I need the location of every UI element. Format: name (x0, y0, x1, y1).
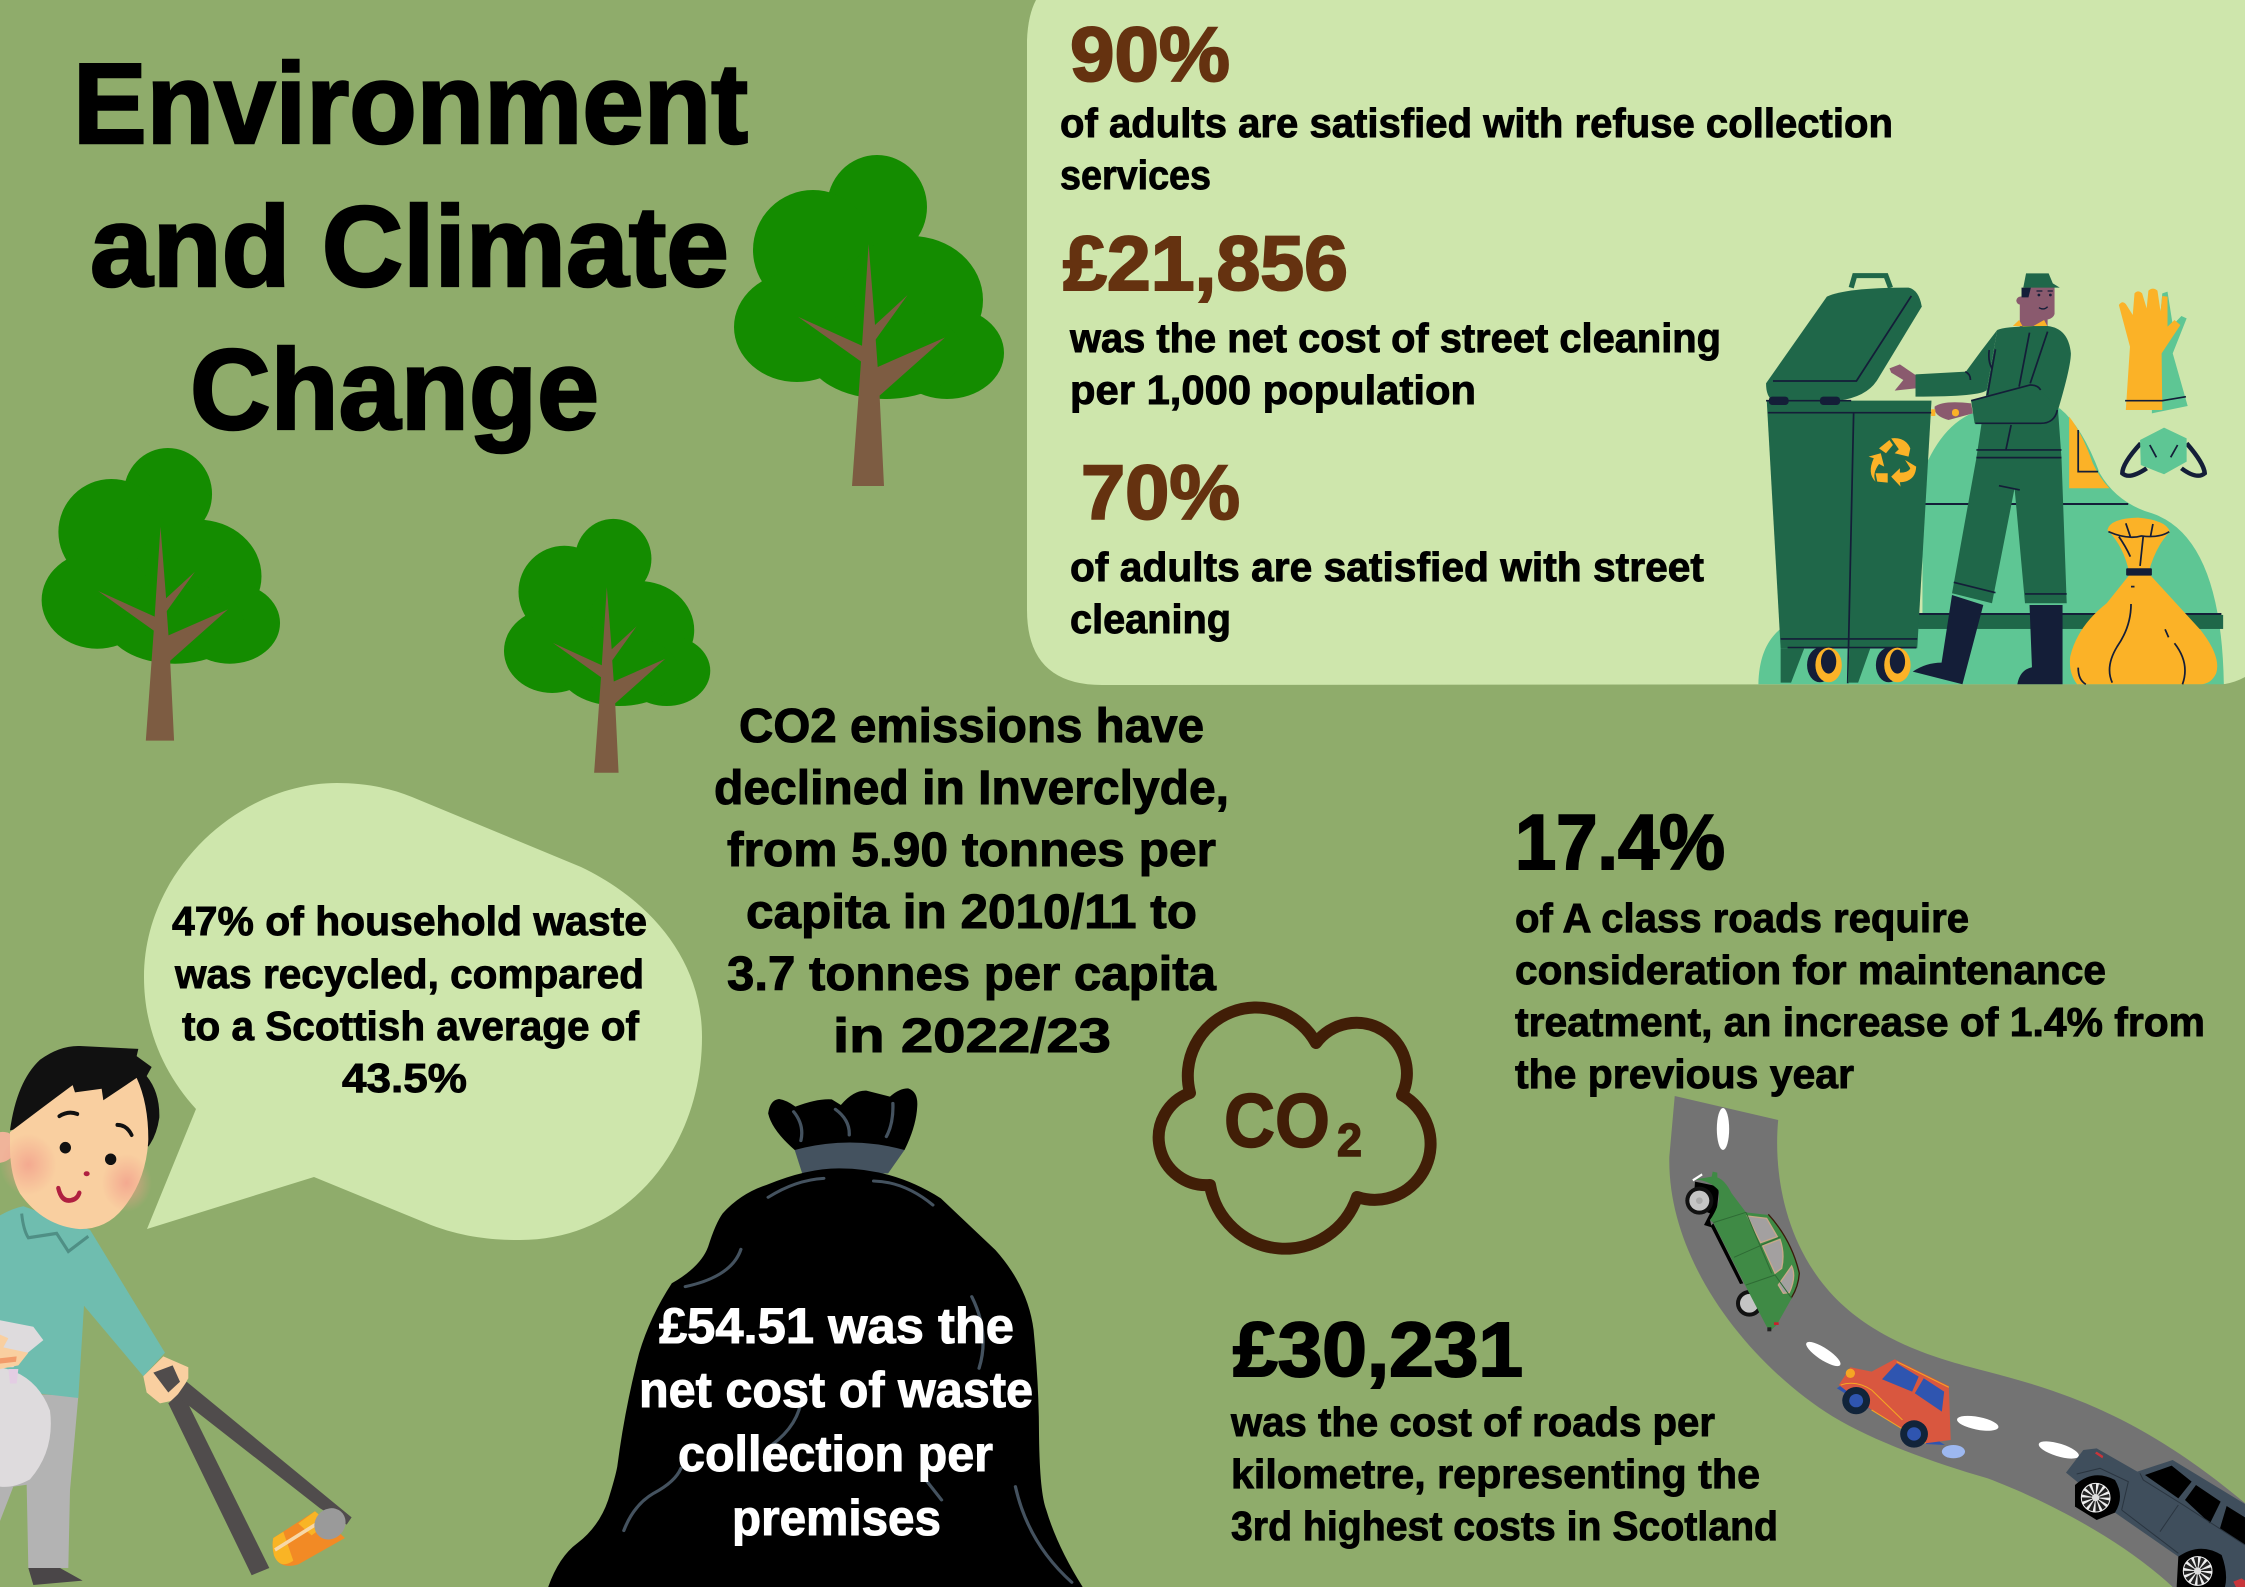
icon: CO2 cloud: CO (1224, 1079, 1330, 1164)
stat: A class roads: consideration for maintenance (1515, 947, 2106, 993)
text: net cost of waste collection: collection per (678, 1426, 993, 1482)
car: red (1837, 1359, 1965, 1458)
text: recycling rate: was recycled, compared (174, 951, 644, 997)
illustration: boy litter picking (0, 1046, 352, 1585)
stat: 70% street cleaning satisfaction: cleaning (1070, 596, 1231, 642)
text: net cost of waste collection: net cost of waste (639, 1362, 1033, 1418)
stat: 90% refuse collection satisfaction: 90% (1070, 12, 1230, 98)
title: Change (190, 327, 599, 454)
text: net cost of waste collection (639, 1298, 1033, 1546)
text: CO2 emissions decline: declined in Inverclyde, (714, 762, 1229, 815)
text: CO2 emissions decline: 3.7 tonnes per capita (727, 948, 1216, 1001)
text: CO2 emissions decline: from 5.90 tonnes per (727, 824, 1216, 877)
stat: cost of roads: was the cost of roads per (1230, 1399, 1715, 1445)
stat: A class roads: the previous year (1515, 1051, 1854, 1097)
stat: street cleaning net cost: was the net cost of street cleaning (1069, 315, 1721, 361)
stat: A class roads: treatment, an increase of 1.4% from (1515, 999, 2205, 1045)
icon: tree centre (504, 519, 710, 773)
speech bubble (144, 783, 702, 1240)
text: recycling rate: 47% of household waste (172, 898, 647, 944)
icon: tree lower left (42, 448, 280, 741)
illustration: road with cars (1669, 1096, 2245, 1587)
icon: CO2 cloud: 2 (1337, 1114, 1362, 1166)
icon: CO2 cloud (1159, 1008, 1431, 1249)
title: Environment (73, 41, 748, 168)
panel: refuse and street cleaning stats (1027, 0, 2245, 685)
icon: tree top right of title (734, 155, 1004, 486)
illustration: black bin bag (548, 1088, 1083, 1587)
title: and Climate (90, 184, 729, 311)
stat: cost of roads: 3rd highest costs in Scotland (1231, 1503, 1778, 1549)
stat: cost of roads: £30,231 (1233, 1307, 1523, 1393)
stat: A class roads: 17.4% (1515, 798, 1725, 886)
text: recycling rate (172, 898, 647, 1101)
stat: 70% street cleaning satisfaction: of adults are satisfied with street (1070, 544, 1704, 590)
car: green (1685, 1172, 1799, 1331)
text: recycling rate: 43.5% (342, 1055, 467, 1101)
stat: 70% street cleaning satisfaction: 70% (1081, 450, 1240, 536)
title (73, 41, 748, 454)
illustration: refuse worker with wheelie bin (1758, 273, 2224, 684)
text: net cost of waste collection: £54.51 was the (659, 1298, 1014, 1354)
stat: 90% refuse collection satisfaction (1060, 12, 1893, 198)
stat: 90% refuse collection satisfaction: services (1060, 152, 1211, 198)
stat: cost of roads (1230, 1307, 1778, 1549)
stat: 70% street cleaning satisfaction (1070, 450, 1704, 642)
text: CO2 emissions decline: CO2 emissions have (739, 700, 1204, 753)
car: dark grey (2066, 1448, 2245, 1587)
text: net cost of waste collection: premises (732, 1490, 941, 1546)
stat: A class roads: of A class roads require (1515, 895, 1969, 941)
stat: street cleaning net cost (1063, 221, 1721, 413)
text: CO2 emissions decline: capita in 2010/11 to (746, 886, 1197, 939)
stat: street cleaning net cost: £21,856 (1063, 221, 1348, 307)
text: recycling rate: to a Scottish average of (182, 1003, 639, 1049)
stat: 90% refuse collection satisfaction: of adults are satisfied with refuse collection (1060, 100, 1893, 146)
stat: street cleaning net cost: per 1,000 population (1070, 367, 1476, 413)
text: CO2 emissions decline: in 2022/23 (833, 1010, 1111, 1063)
text: CO2 emissions decline (714, 700, 1229, 1063)
stat: A class roads (1515, 798, 2205, 1097)
stat: cost of roads: kilometre, representing the (1231, 1451, 1760, 1497)
